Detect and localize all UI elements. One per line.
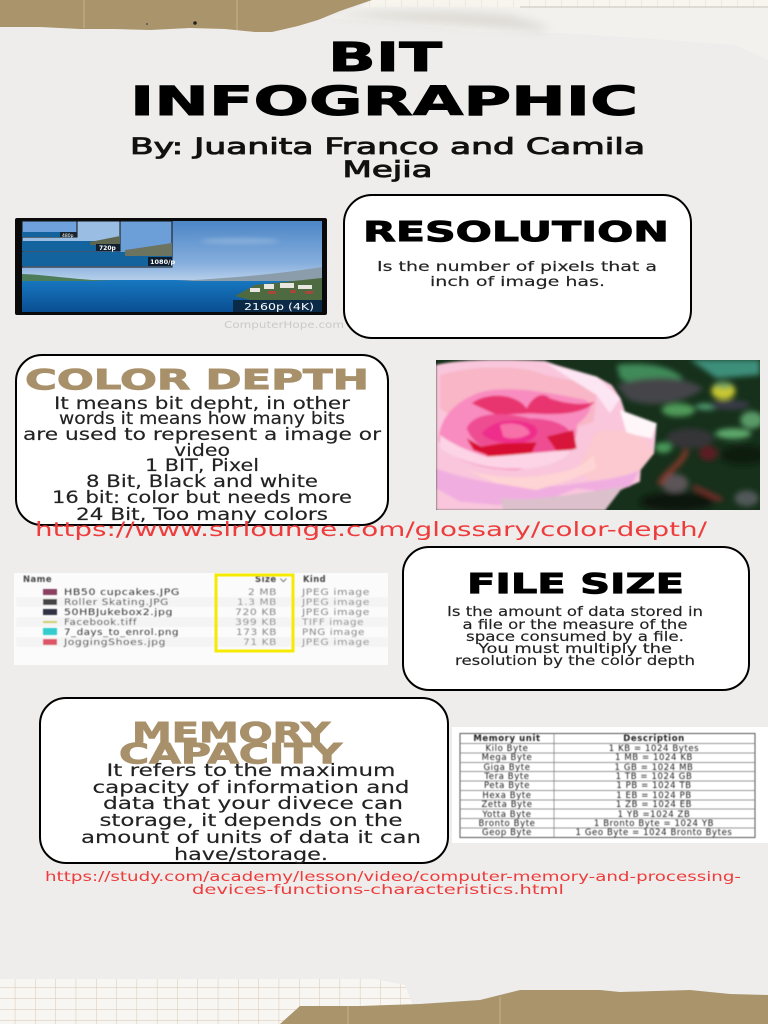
- image: file size listing: JPEG image: [301, 588, 370, 598]
- image: memory unit table: Geop Byte: [482, 828, 532, 838]
- title: BIT: [328, 35, 443, 81]
- image: resolution comparison: 2160p (4K): [244, 302, 314, 313]
- link: color depth source: https://www.slrlounge.com/glossary/color-depth/: [35, 518, 708, 541]
- heading: color depth: COLOR DEPTH: [25, 363, 369, 396]
- text: color depth explanation: 16 bit: color but needs more: [52, 488, 352, 507]
- image: file size listing: 1.3 MB: [237, 598, 277, 608]
- torn cardboard: bottom right: [280, 990, 768, 1024]
- text: file size definition: [447, 605, 703, 669]
- text: color depth explanation: 8 Bit, Black and white: [86, 472, 318, 491]
- text: memory capacity explanation: storage, it depends on the: [100, 811, 402, 830]
- text: resolution definition: [377, 259, 657, 290]
- image: memory unit table: 1 GB = 1024 MB: [615, 763, 693, 773]
- image: file size listing: JPEG image: [301, 598, 370, 608]
- text: file size definition: Is the amount of data stored in: [447, 605, 703, 620]
- image: file size listing: PNG image: [302, 628, 365, 638]
- image: pink rose: [436, 360, 767, 511]
- image: memory unit table: Zetta Byte: [481, 800, 533, 810]
- image: resolution comparison: 720p: [99, 245, 117, 252]
- text: color depth explanation: It means bit depht, in other: [54, 394, 350, 413]
- torn paper: top right: [330, 0, 768, 60]
- text: resolution definition: inch of image has.: [430, 274, 605, 290]
- link: memory capacity source: devices-functions-characteristics.html: [192, 882, 564, 898]
- image: memory unit table: Yotta Byte: [481, 810, 532, 820]
- title: INFOGRAPHIC: [130, 79, 638, 125]
- panel: memory capacity: [40, 698, 448, 864]
- link: memory capacity source: https://study.com/academy/lesson/video/computer-memory-and-processing-: [45, 869, 741, 885]
- heading: memory capacity: CAPACITY: [119, 737, 343, 770]
- text: color depth explanation: 24 Bit, Too many colors: [76, 505, 328, 524]
- image: file size listing: 399 KB: [235, 618, 277, 628]
- text: color depth explanation: video: [174, 441, 230, 460]
- image: resolution comparison: [15, 218, 344, 331]
- byline: By: Juanita Franco and Camila: [130, 135, 645, 160]
- image: file size listing: 50HBJukebox2.jpg: [64, 608, 173, 618]
- text: resolution definition: Is the number of pixels that a: [377, 259, 657, 275]
- image: memory unit table: Hexa Byte: [482, 791, 532, 801]
- image: memory unit table: 1 KB = 1024 Bytes: [609, 744, 699, 754]
- text: memory capacity explanation: capacity of information and: [92, 778, 410, 797]
- image: file size listing: 720 KB: [235, 608, 277, 618]
- image: memory unit table: 1 PB = 1024 TB: [616, 781, 692, 791]
- text: memory capacity explanation: amount of units of data it can: [81, 828, 421, 847]
- image: resolution comparison: 480p: [62, 233, 74, 239]
- image: memory unit table: Description: [623, 734, 685, 744]
- image: memory unit table: 1 YB =1024 ZB: [618, 810, 690, 820]
- image: memory unit table: Memory unit: [473, 734, 541, 744]
- image: file size listing: JPEG image: [301, 638, 370, 648]
- heading: memory capacity: MEMORY: [132, 716, 331, 749]
- torn cardboard: top left: [0, 0, 372, 32]
- image: file size listing: TIFF image: [301, 618, 364, 628]
- image: memory unit table: 1 Geo Byte = 1024 Bronto Bytes: [576, 828, 732, 838]
- text: color depth explanation: 1 BIT, Pixel: [145, 456, 259, 475]
- panel: resolution: [344, 195, 691, 338]
- text: file size definition: You must multiply the: [477, 642, 672, 657]
- image: resolution comparison: 1080/p: [150, 258, 175, 266]
- heading: file size: FILE SIZE: [467, 567, 684, 600]
- text: color depth explanation: [23, 394, 381, 524]
- text: file size definition: a file or the measure of the: [462, 618, 688, 633]
- text: memory capacity explanation: It refers to the maximum: [106, 761, 396, 780]
- image: memory unit table: 1 EB = 1024 PB: [616, 791, 692, 801]
- byline: [130, 135, 645, 183]
- text: memory capacity explanation: data that your divece can: [103, 794, 403, 813]
- image: file size listing: Kind: [303, 575, 326, 585]
- link: memory capacity source: [45, 869, 741, 898]
- image: file size listing: [14, 573, 388, 665]
- image: file size listing: 7_days_to_enrol.png: [64, 628, 179, 638]
- image: file size listing: Facebook.tiff: [64, 618, 137, 628]
- text: memory capacity explanation: [81, 761, 421, 864]
- image: memory unit table: 1 ZB = 1024 EB: [616, 800, 692, 810]
- heading: memory capacity: [119, 716, 343, 770]
- image: file size listing: JPEG image: [301, 608, 370, 618]
- panel: file size: [403, 547, 749, 690]
- image: file size listing: 2 MB: [248, 588, 277, 598]
- image: file size listing: 71 KB: [243, 638, 277, 648]
- text: color depth explanation: are used to represent a image or: [23, 425, 381, 444]
- text: file size definition: space consumed by a file.: [466, 630, 684, 645]
- torn graph paper: bottom left: [0, 979, 430, 1024]
- image: resolution comparison: ComputerHope.com: [224, 320, 344, 331]
- image: memory unit table: Peta Byte: [484, 781, 530, 791]
- title: [130, 35, 638, 125]
- image: memory unit table: 1 MB = 1024 KB: [615, 753, 693, 763]
- image: memory unit table: Giga Byte: [483, 763, 531, 773]
- panel: color depth: [16, 355, 388, 525]
- image: memory unit table: Bronto Byte: [478, 819, 536, 829]
- heading: resolution: RESOLUTION: [363, 215, 669, 248]
- image: memory unit table: Mega Byte: [482, 753, 532, 763]
- image: memory unit table: 1 TB = 1024 GB: [616, 772, 692, 782]
- image: file size listing: Name: [23, 575, 52, 585]
- text: file size definition: resolution by the color depth: [455, 654, 695, 669]
- image: memory unit table: Tera Byte: [483, 772, 530, 782]
- image: memory unit table: 1 Bronto Byte = 1024 YB: [594, 819, 714, 829]
- image: file size listing: JoggingShoes.jpg: [63, 638, 166, 648]
- text: memory capacity explanation: have/storage.: [174, 845, 328, 864]
- image: file size listing: Roller Skating.JPG: [64, 598, 169, 608]
- image: file size listing: Size ⌵: [255, 575, 287, 585]
- image: memory unit table: [452, 727, 768, 843]
- byline: Mejia: [342, 158, 432, 183]
- image: file size listing: HB50 cupcakes.JPG: [64, 588, 180, 598]
- text: color depth explanation: words it means how many bits: [59, 409, 345, 428]
- image: file size listing: 173 KB: [236, 628, 277, 638]
- image: memory unit table: Kilo Byte: [485, 744, 529, 754]
